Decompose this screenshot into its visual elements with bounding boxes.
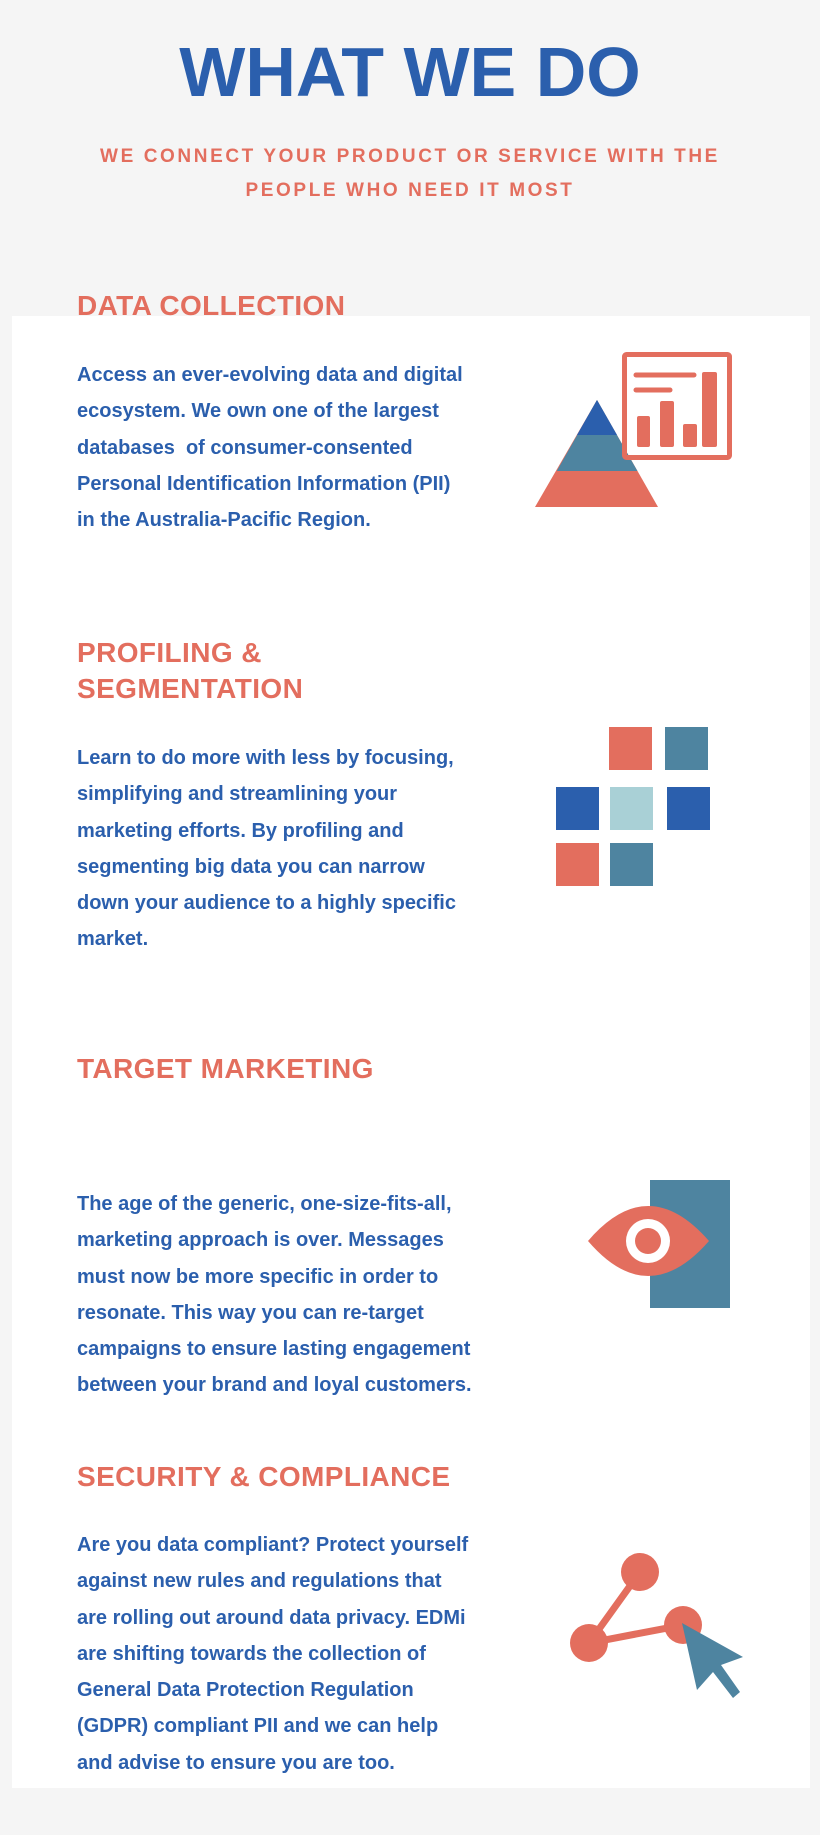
heading: security: SECURITY & COMPLIANCE [77, 1461, 450, 1492]
text: data collection: in the Australia-Pacific Region. [77, 509, 371, 531]
text: target marketing: campaigns to ensure lasting engagement [77, 1338, 470, 1360]
subtitle [100, 146, 720, 201]
icon: eye [588, 1180, 730, 1308]
white panel [12, 316, 810, 1788]
subtitle: PEOPLE WHO NEED IT MOST [246, 180, 574, 201]
text: data collection [77, 364, 463, 531]
text: security: are shifting towards the collection of [77, 1643, 426, 1665]
text: data collection: ecosystem. We own one of the largest [77, 400, 439, 422]
heading: profiling: SEGMENTATION [77, 673, 303, 704]
text: profiling: simplifying and streamlining your [77, 783, 397, 805]
heading: target marketing: TARGET MARKETING [77, 1053, 374, 1084]
text: security: and advise to ensure you are too. [77, 1752, 395, 1774]
icon: squares grid [556, 727, 710, 886]
text: target marketing: between your brand and loyal customers. [77, 1374, 472, 1396]
icon: network and cursor [570, 1553, 743, 1698]
text: profiling: Learn to do more with less by focusing, [77, 747, 454, 769]
text: profiling: marketing efforts. By profiling and [77, 820, 404, 842]
text: data collection: Personal Identification Information (PII) [77, 473, 450, 495]
text: profiling: market. [77, 928, 148, 950]
text: data collection: databases of consumer-consented [77, 437, 413, 459]
text: target marketing: The age of the generic, one-size-fits-all, [77, 1193, 452, 1215]
heading: data collection: DATA COLLECTION [77, 290, 345, 321]
text: data collection: Access an ever-evolving data and digital [77, 364, 463, 386]
text: profiling: down your audience to a highly specific [77, 892, 456, 914]
subtitle: WE CONNECT YOUR PRODUCT OR SERVICE WITH THE [100, 146, 720, 167]
text: target marketing: marketing approach is over. Messages [77, 1229, 444, 1251]
text: target marketing: must now be more specific in order to [77, 1266, 438, 1288]
text: target marketing [77, 1193, 472, 1396]
text: security [77, 1534, 468, 1774]
text: security: are rolling out around data privacy. EDMi [77, 1607, 466, 1629]
text: profiling: segmenting big data you can narrow [77, 856, 425, 878]
icon: pyramid and chart [535, 352, 732, 507]
text: security: (GDPR) compliant PII and we can help [77, 1715, 438, 1737]
text: security: against new rules and regulations that [77, 1570, 442, 1592]
title: WHAT WE DO [179, 33, 641, 111]
text: profiling [77, 747, 456, 950]
heading: profiling [77, 637, 303, 704]
text: security: Are you data compliant? Protect yourself [77, 1534, 468, 1556]
text: security: General Data Protection Regulation [77, 1679, 414, 1701]
text: target marketing: resonate. This way you can re-target [77, 1302, 424, 1324]
heading: profiling: PROFILING & [77, 637, 262, 668]
